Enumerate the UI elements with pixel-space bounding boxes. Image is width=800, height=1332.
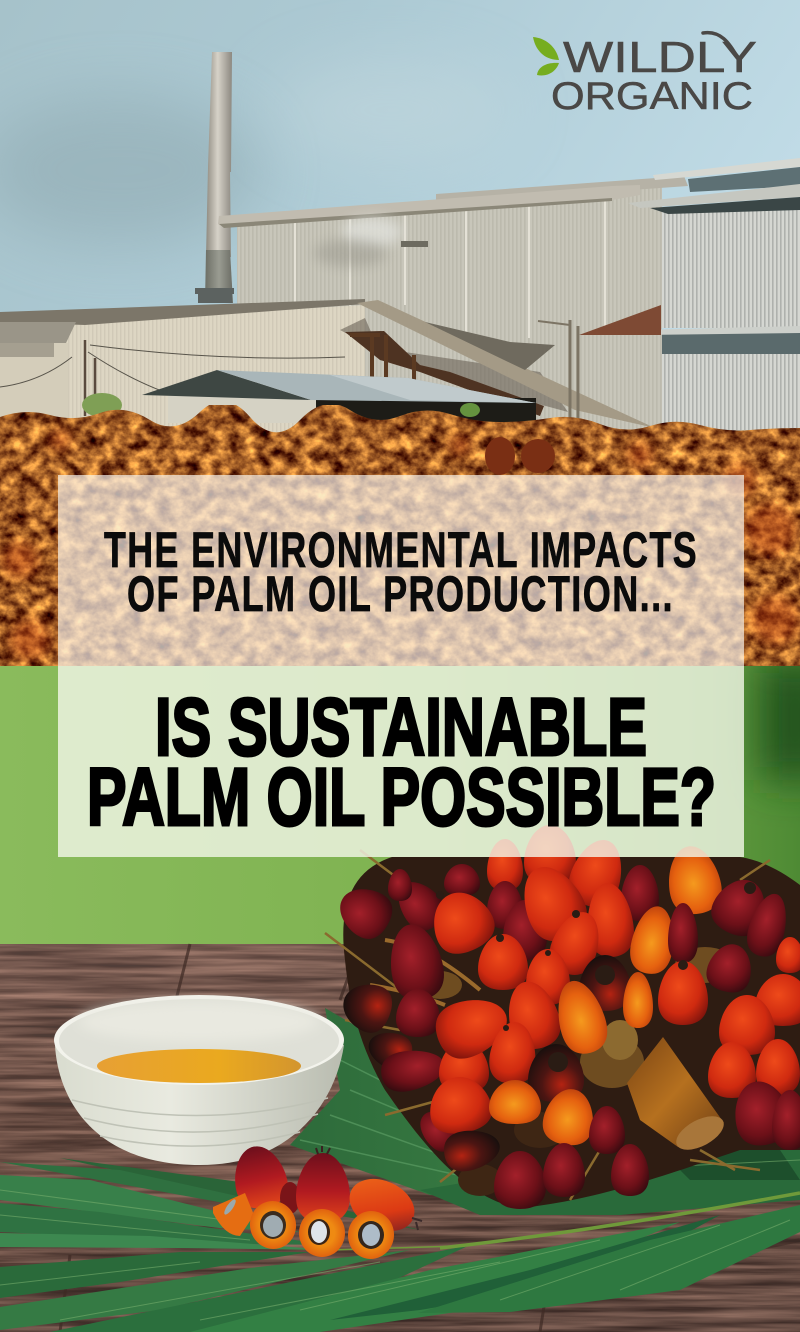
cut half fruit <box>344 1207 398 1263</box>
logo: Wildly Organic <box>533 33 757 118</box>
palm frond leaves <box>0 1008 800 1332</box>
logo word: organic: ORGANIC <box>551 75 753 118</box>
small cut fruits <box>213 1141 423 1263</box>
sky background <box>0 0 800 440</box>
factory: lower left building <box>0 299 365 432</box>
fibrous husks <box>418 947 735 1196</box>
fruit pile <box>0 405 800 667</box>
fruit dark tips <box>436 882 756 1072</box>
palm oil <box>97 1049 301 1083</box>
cut half fruit <box>299 1209 345 1257</box>
stalk <box>627 1037 724 1147</box>
bowl rim <box>54 995 344 1085</box>
factory: main building <box>218 176 688 430</box>
bowl body <box>55 1045 344 1165</box>
oil bowl <box>54 995 344 1165</box>
palm fruit bunch <box>325 825 800 1209</box>
icon: leaves <box>533 37 559 75</box>
cut half fruit <box>245 1196 301 1254</box>
chimney <box>195 52 234 303</box>
title panel: top <box>58 475 744 666</box>
title panel: bottom <box>58 666 744 857</box>
shed <box>142 370 536 423</box>
conveyor <box>340 300 655 428</box>
fruits <box>330 825 800 1209</box>
green blurred background <box>0 660 800 951</box>
factory: right tower <box>579 158 800 430</box>
logo word: wildly: WILDLY <box>563 33 757 82</box>
wooden table <box>0 944 800 1332</box>
